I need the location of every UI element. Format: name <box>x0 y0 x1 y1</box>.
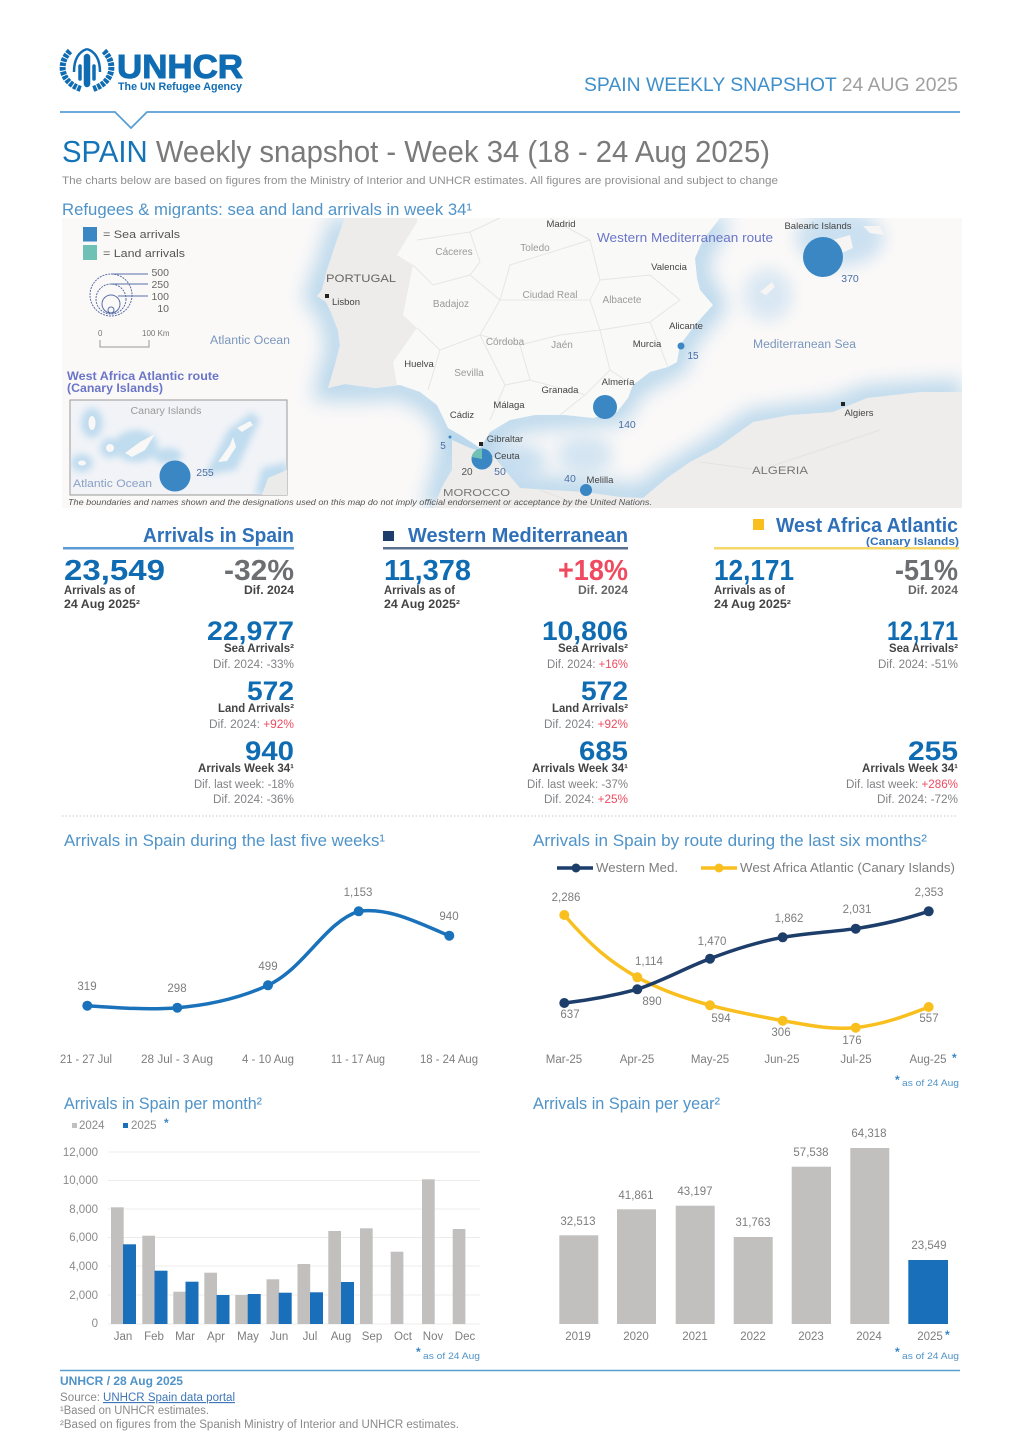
line chart: by route: Jun-25 <box>764 1054 800 1066</box>
bar legend: 2025 <box>131 1120 157 1132</box>
heading: by route: Arrivals in Spain by route during the last six months² <box>533 831 927 850</box>
panel: Arrivals in Spain: -32% <box>224 555 294 587</box>
bar chart: per year: 2024 <box>856 1331 882 1343</box>
panel: Arrivals in Spain <box>63 525 295 806</box>
line chart: last five weeks: 21 - 27 Jul <box>60 1054 112 1066</box>
map labels: Toledo <box>520 243 550 254</box>
line chart: last five weeks: 18 - 24 Aug <box>420 1054 478 1066</box>
panel: Arrivals in Spain: Dif. 2024: -33% <box>213 659 294 671</box>
map labels: Atlantic Ocean <box>210 335 290 347</box>
bar chart: per year: 41,861 <box>618 1190 654 1202</box>
bar chart: per year: 2021 <box>682 1331 708 1343</box>
panel: Western Mediterranean: Dif. 2024: +16% <box>547 659 628 671</box>
line chart: by route: May-25 <box>691 1054 729 1066</box>
bar chart: per month: Mar <box>175 1331 195 1343</box>
line chart: by route: 1,114 <box>635 956 664 968</box>
panel: Arrivals in Spain: 23,549 <box>64 555 165 587</box>
bar chart: per year: 43,197 <box>677 1186 713 1198</box>
panel: Arrivals in Spain: Arrivals as of <box>64 585 135 597</box>
logo wordmark: UNHCR <box>117 48 243 85</box>
panel: Western Mediterranean: +18% <box>558 555 628 587</box>
bar chart: per month: 2,000 <box>69 1290 98 1302</box>
map legend: 250 <box>151 279 169 291</box>
map legend: = Land arrivals <box>103 248 186 260</box>
bar chart: per month: Nov <box>423 1331 443 1343</box>
bar chart: per month: Sep <box>362 1331 382 1343</box>
inset map: Canary Islands <box>70 400 287 495</box>
line chart: by route: * <box>952 1051 957 1065</box>
panel: Arrivals in Spain: 22,977 <box>207 616 294 646</box>
map disclaimer: The boundaries and names shown and the designations used on this map do not imply official endorsement or acceptance by the United Nations. <box>68 498 652 507</box>
map legend: 10 <box>157 303 169 315</box>
panel: Western Mediterranean: 685 <box>579 736 628 766</box>
line chart: by route: 637 <box>560 1009 580 1021</box>
panel: Western Mediterranean: 10,806 <box>542 616 628 646</box>
inset map: Canary Islands: Atlantic Ocean <box>73 478 152 490</box>
map labels: Cáceres <box>435 247 473 258</box>
panel: West Africa Atlantic: Dif. last week: +286% <box>846 779 958 791</box>
panel: Arrivals in Spain: 24 Aug 2025² <box>64 599 140 611</box>
bar chart: per year: * <box>945 1328 950 1342</box>
panel: West Africa Atlantic: Sea Arrivals² <box>889 643 958 655</box>
subtitle: The charts below are based on figures from the Ministry of Interior and UNHCR estimates. All figures are provisional and subject to change <box>62 175 778 187</box>
bar chart: per month: Apr <box>207 1331 225 1343</box>
bar legend <box>72 1116 169 1132</box>
panel: Arrivals in Spain: Dif. 2024: -36% <box>213 794 294 806</box>
map labels: Badajoz <box>433 299 469 310</box>
panel: Arrivals in Spain: Arrivals in Spain <box>143 525 294 547</box>
line chart: last five weeks: 319 <box>77 981 97 993</box>
panel: Western Mediterranean: 11,378 <box>384 555 471 587</box>
panel: West Africa Atlantic: (Canary Islands) <box>866 536 959 548</box>
bar chart: per month: 12,000 <box>63 1147 98 1159</box>
panel: Western Mediterranean <box>383 525 629 806</box>
line chart: by route: 557 <box>919 1013 939 1025</box>
map labels: Ciudad Real <box>522 290 578 301</box>
panel: Western Mediterranean: Dif. 2024 <box>578 585 629 597</box>
panel: West Africa Atlantic: Dif. 2024: -51% <box>878 659 958 671</box>
map labels: Alicante <box>669 321 703 332</box>
panel: West Africa Atlantic: West Africa Atlantic <box>776 515 958 537</box>
map labels: Melilla <box>587 475 614 486</box>
bar chart: per year <box>533 1094 959 1362</box>
line chart: by route: 890 <box>642 996 662 1008</box>
map labels: Valencia <box>651 262 688 273</box>
panel: Western Mediterranean: Arrivals as of <box>384 585 455 597</box>
line chart: by route: * <box>895 1073 900 1087</box>
map labels <box>67 219 874 499</box>
footer: Source: <box>60 1392 100 1404</box>
heading: map section: Refugees & migrants: sea and land arrivals in week 34¹ <box>62 200 472 219</box>
map labels: Ceuta <box>494 451 520 462</box>
panel: Western Mediterranean: Western Mediterranean <box>408 525 628 547</box>
bar chart: per month: * <box>416 1345 421 1359</box>
panel: map <box>62 210 962 508</box>
map bubbles: 140 <box>618 419 636 431</box>
line chart: by route: Apr-25 <box>620 1054 654 1066</box>
panel: West Africa Atlantic: Dif. 2024 <box>908 585 959 597</box>
logo tagline: The UN Refugee Agency <box>118 81 243 93</box>
panel: Western Mediterranean: 24 Aug 2025² <box>384 599 460 611</box>
bar chart: per month: 0 <box>92 1318 98 1330</box>
chart legend <box>557 861 955 875</box>
panel: Arrivals in Spain: Land Arrivals² <box>218 703 294 715</box>
panel: West Africa Atlantic: Arrivals Week 34¹ <box>862 763 958 775</box>
map bubbles: 40 <box>564 473 576 485</box>
panel: Arrivals in Spain: Dif. 2024 <box>244 585 295 597</box>
line chart: by route: 1,862 <box>775 913 803 925</box>
panel: West Africa Atlantic: Dif. 2024: -72% <box>877 794 958 806</box>
bar chart: per year: 2023 <box>798 1331 824 1343</box>
map labels: Balearic Islands <box>784 221 852 232</box>
line chart: by route: 594 <box>711 1013 731 1025</box>
panel: Arrivals in Spain: 572 <box>247 676 294 706</box>
provinces <box>413 218 680 420</box>
heading: five weeks: Arrivals in Spain during the last five weeks¹ <box>64 831 385 850</box>
bar chart: per year: 2020 <box>623 1331 649 1343</box>
bar chart: per year: 57,538 <box>793 1147 829 1159</box>
map labels: Western Mediterranean route <box>597 231 773 245</box>
panel: Arrivals in Spain: Dif. last week: -18% <box>194 779 294 791</box>
panel: Western Mediterranean: Sea Arrivals² <box>558 643 628 655</box>
map labels: (Canary Islands) <box>67 381 163 395</box>
bar chart: per month: May <box>237 1331 259 1343</box>
panel: West Africa Atlantic <box>714 515 959 806</box>
coastal glow <box>317 218 962 508</box>
map labels: Granada <box>542 385 579 396</box>
land: Iberia <box>317 218 720 448</box>
line chart: by route: 176 <box>842 1035 862 1047</box>
map labels: West Africa Atlantic route <box>67 369 219 383</box>
line chart: by route: 2,353 <box>915 887 943 899</box>
land: North Africa <box>433 392 962 508</box>
bar chart: per month: Aug <box>331 1331 351 1343</box>
map bubbles: 370 <box>841 273 859 285</box>
bar chart: per year: 2022 <box>740 1331 766 1343</box>
bar chart: per month: Feb <box>144 1331 164 1343</box>
bar chart: per month: Oct <box>394 1331 413 1343</box>
bar chart: per year: 64,318 <box>851 1128 887 1140</box>
line chart: last five weeks: 298 <box>167 983 187 995</box>
bar chart: per year: 31,763 <box>735 1217 771 1229</box>
bar chart: per month: Jun <box>270 1331 288 1343</box>
map legend: 100 <box>151 291 169 303</box>
line chart: by route: 2,286 <box>552 892 580 904</box>
bar chart: per year: 23,549 <box>911 1240 947 1252</box>
map labels: Murcia <box>633 339 662 350</box>
line chart: by route: Mar-25 <box>546 1054 582 1066</box>
map labels: Lisbon <box>332 297 360 308</box>
map labels: Algiers <box>844 408 874 419</box>
bar chart: per month: 4,000 <box>69 1261 98 1273</box>
chart legend: Western Med. <box>596 861 678 875</box>
line chart: by route: Jul-25 <box>840 1054 872 1066</box>
line chart: by route: 2,031 <box>843 904 871 916</box>
panel: Western Mediterranean: Land Arrivals² <box>552 703 628 715</box>
bar chart: per year: 2019 <box>565 1331 591 1343</box>
map bubbles: 15 <box>687 351 699 362</box>
line chart: last five weeks: 4 - 10 Aug <box>242 1054 294 1066</box>
panel: Arrivals in Spain: Sea Arrivals² <box>224 643 294 655</box>
panel: West Africa Atlantic: 24 Aug 2025² <box>714 599 791 611</box>
land: Portugal <box>317 218 417 388</box>
bar chart: per year: * <box>895 1345 900 1359</box>
line chart: by route: 1,470 <box>698 936 726 948</box>
chart legend: West Africa Atlantic (Canary Islands) <box>740 861 955 875</box>
map legend: = Sea arrivals <box>103 229 181 241</box>
line chart: last five weeks: 1,153 <box>344 887 372 899</box>
inset map: Canary Islands: Canary Islands <box>130 406 202 417</box>
bar chart: per month <box>63 1094 480 1362</box>
line chart: by route: as of 24 Aug <box>902 1078 959 1089</box>
panel: Western Mediterranean: Dif. 2024: +92% <box>544 719 628 731</box>
line chart: last five weeks: 28 Jul - 3 Aug <box>141 1054 213 1066</box>
footer: ¹Based on UNHCR estimates. <box>60 1405 209 1417</box>
panel: Arrivals in Spain: 940 <box>245 736 294 766</box>
map labels: Huelva <box>404 359 434 370</box>
icon: wreath and family <box>63 49 111 89</box>
line chart: by route <box>533 831 959 1089</box>
panel: Western Mediterranean: Arrivals Week 34¹ <box>532 763 628 775</box>
bar chart: per month: 8,000 <box>69 1204 98 1216</box>
title: SPAIN Weekly snapshot - Week 34 (18 - 24 Aug 2025) <box>62 134 770 169</box>
map labels: Gibraltar <box>487 434 523 445</box>
panel: Western Mediterranean: Dif. 2024: +25% <box>544 794 628 806</box>
line chart: last five weeks: 499 <box>258 961 278 973</box>
bar chart: per month: 6,000 <box>69 1232 98 1244</box>
map labels: ALGERIA <box>752 465 809 477</box>
bar chart: per month: Jul <box>303 1331 317 1343</box>
map labels: Málaga <box>493 400 525 411</box>
map labels: Jaén <box>551 340 573 351</box>
bar legend: 2024 <box>79 1120 105 1132</box>
bar chart: per month: as of 24 Aug <box>423 1351 480 1362</box>
bar chart: per month: Jan <box>114 1331 132 1343</box>
map bubbles: 5 <box>440 441 446 452</box>
bar chart: per month: 10,000 <box>63 1175 98 1187</box>
bar chart: per year: 32,513 <box>560 1216 596 1228</box>
map labels: PORTUGAL <box>326 273 396 285</box>
footer: UNHCR Spain data portal <box>103 1392 235 1404</box>
map labels: Mediterranean Sea <box>753 339 857 351</box>
panel: West Africa Atlantic: 12,171 <box>714 555 794 587</box>
land: Balearic islands <box>760 226 884 295</box>
panel: Western Mediterranean: Dif. last week: -37% <box>527 779 628 791</box>
map bubbles: 20 <box>461 467 473 478</box>
footer: UNHCR / 28 Aug 2025 <box>60 1376 184 1388</box>
map labels: MOROCCO <box>443 487 510 499</box>
line chart: last five weeks: 940 <box>439 911 459 923</box>
line chart: last five weeks: 11 - 17 Aug <box>331 1054 385 1066</box>
line chart: last five weeks <box>60 831 478 1066</box>
map bubbles: 50 <box>494 466 506 478</box>
map legend: 100 Km <box>142 329 170 338</box>
map bubbles <box>440 237 859 496</box>
map legend: 500 <box>151 267 169 279</box>
map labels: Madrid <box>546 219 576 230</box>
map legend <box>83 227 186 347</box>
footer <box>60 1376 459 1431</box>
heading: per month: Arrivals in Spain per month² <box>64 1094 262 1113</box>
logo: UNHCR <box>63 48 243 93</box>
map labels: Sevilla <box>454 368 484 379</box>
bar legend: * <box>164 1116 169 1130</box>
line chart: by route: Aug-25 <box>909 1054 947 1066</box>
bar chart: per year: as of 24 Aug <box>902 1351 959 1362</box>
panel: West Africa Atlantic: 255 <box>908 736 958 766</box>
heading: per year: Arrivals in Spain per year² <box>533 1094 720 1113</box>
header label: SPAIN WEEKLY SNAPSHOT 24 AUG 2025 <box>584 74 958 96</box>
footer: ²Based on figures from the Spanish Ministry of Interior and UNHCR estimates. <box>60 1419 459 1431</box>
panel: Arrivals in Spain: Dif. 2024: +92% <box>209 719 294 731</box>
panel: West Africa Atlantic: 12,171 <box>887 616 958 646</box>
map labels: Albacete <box>603 295 642 306</box>
map legend: 0 <box>98 329 103 338</box>
panel: Western Mediterranean: 572 <box>581 676 628 706</box>
bar chart: per month: Dec <box>455 1331 475 1343</box>
line chart: by route: 306 <box>771 1027 791 1039</box>
panel: West Africa Atlantic: Arrivals as of <box>714 585 785 597</box>
panel: Arrivals in Spain: Arrivals Week 34¹ <box>198 763 294 775</box>
map labels: Almería <box>602 377 635 388</box>
map labels: Córdoba <box>486 337 525 348</box>
bar chart: per year: 2025 <box>917 1331 943 1343</box>
panel: West Africa Atlantic: -51% <box>895 555 958 587</box>
inset map: Canary Islands: 255 <box>196 467 214 479</box>
map labels: Cádiz <box>450 410 474 421</box>
